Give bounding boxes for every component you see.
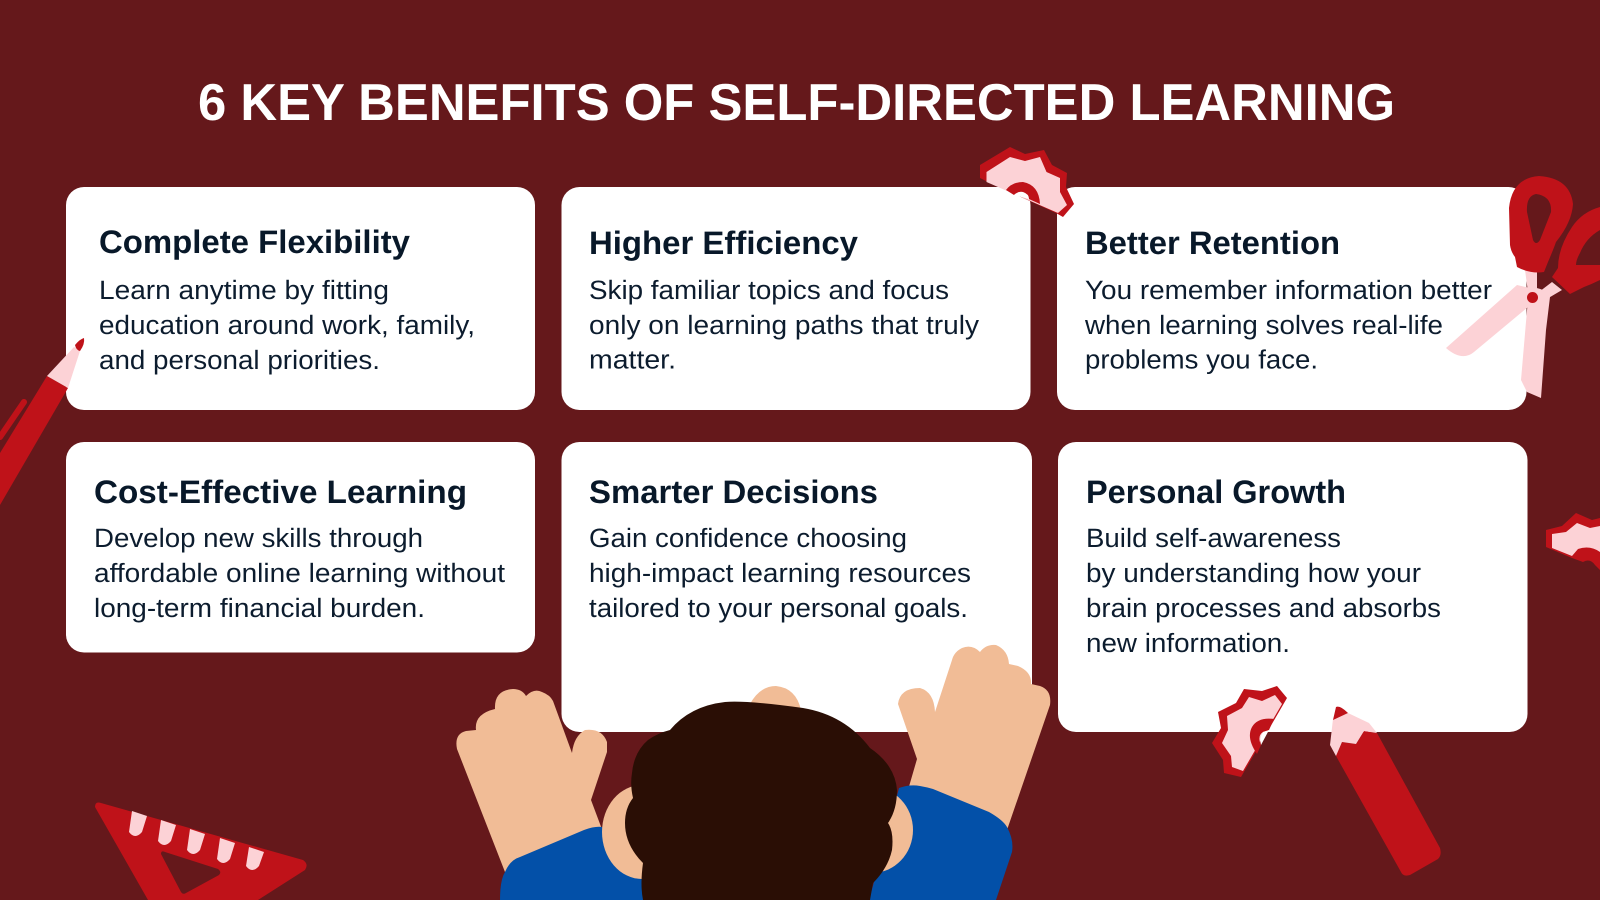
text: cost-effective learning: affordable online learning without [94, 558, 506, 588]
text: personal growth: Build self-awareness [1086, 523, 1341, 553]
text: complete flexibility: Learn anytime by fitting [99, 275, 389, 305]
heading: complete flexibility: Complete Flexibility [99, 224, 410, 260]
heading: smarter decisions: Smarter Decisions [589, 474, 878, 510]
panel: complete flexibility [66, 187, 535, 410]
panel: cost-effective learning [66, 442, 535, 652]
panel: personal growth [1058, 442, 1528, 732]
text: higher efficiency: Skip familiar topics and focus [589, 275, 949, 305]
icon: gear top [980, 147, 1074, 217]
icon: gear bottom [1212, 686, 1287, 777]
top finger [750, 686, 801, 710]
text: better retention: problems you face. [1085, 344, 1318, 374]
text: cost-effective learning: Develop new skills through [94, 523, 423, 553]
text: smarter decisions [589, 523, 971, 623]
text: higher efficiency: matter. [589, 344, 676, 374]
icon: scissors [1446, 176, 1600, 398]
text: cost-effective learning [94, 523, 506, 623]
hair [625, 702, 897, 900]
ruler tick marks [129, 811, 264, 870]
text: personal growth [1086, 523, 1441, 658]
left sleeve [500, 827, 650, 900]
text: smarter decisions: tailored to your personal goals. [589, 593, 968, 623]
panel: higher efficiency [562, 187, 1030, 410]
panel: smarter decisions [562, 442, 1032, 732]
scissors pink arms [1525, 270, 1562, 303]
scissors left handle [1509, 176, 1573, 272]
text: cost-effective learning: long-term financial burden. [94, 593, 425, 623]
right sleeve [869, 785, 1012, 900]
heading: personal growth: Personal Growth [1086, 474, 1346, 510]
right hand [898, 645, 1050, 850]
text: complete flexibility [99, 275, 475, 375]
text: personal growth: by understanding how your [1086, 558, 1421, 588]
ears [602, 785, 913, 879]
text: higher efficiency: only on learning paths that truly [589, 310, 980, 340]
heading: cost-effective learning: Cost-Effective Learning [94, 474, 467, 510]
text: complete flexibility: and personal priorities. [99, 345, 380, 375]
text: personal growth: new information. [1086, 628, 1290, 658]
heading: better retention: Better Retention [1085, 225, 1340, 261]
scissors blades [1446, 285, 1530, 356]
heading: higher efficiency: Higher Efficiency [589, 225, 858, 261]
text: better retention: You remember information better [1085, 275, 1492, 305]
panel: better retention [1057, 187, 1526, 410]
text: complete flexibility: education around work, family, [99, 310, 475, 340]
person illustration [456, 645, 1050, 900]
text: smarter decisions: Gain confidence choosing [589, 523, 907, 553]
text: better retention: when learning solves real-life [1084, 310, 1443, 340]
scissors right handle [1552, 207, 1600, 294]
left hand [456, 689, 607, 880]
title: 6 KEY BENEFITS OF SELF-DIRECTED LEARNING [198, 74, 1395, 132]
text: smarter decisions: high-impact learning resources [589, 558, 971, 588]
text: better retention [1084, 275, 1492, 374]
text: personal growth: brain processes and absorbs [1086, 593, 1441, 623]
icon: red pencil [1330, 707, 1441, 876]
text: higher efficiency [589, 275, 980, 374]
icon: set square ruler [95, 802, 307, 900]
icon: gear right edge [1546, 513, 1600, 570]
icon: red pen left [0, 338, 84, 505]
